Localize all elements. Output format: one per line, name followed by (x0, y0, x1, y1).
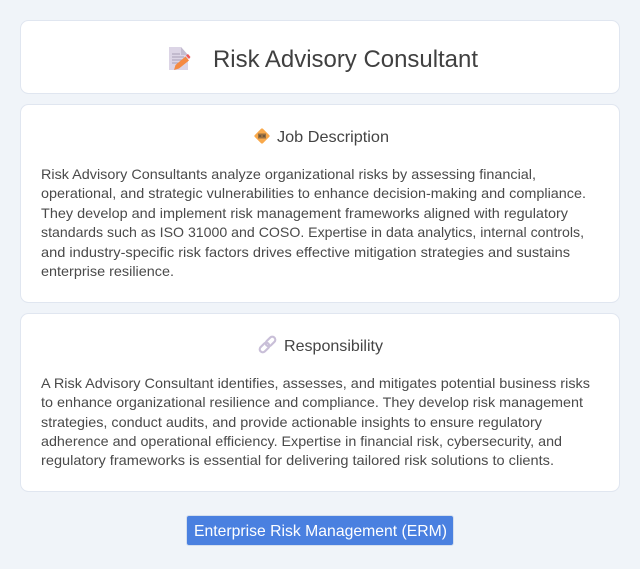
title text: Risk Advisory Consultant (213, 46, 478, 73)
text block: responsibility (41, 375, 590, 468)
text block: job description: enterprise resilience. (41, 263, 174, 279)
text block: responsibility: strategies, conduct audits, and provide actionable insights to ensure regulatory (41, 414, 542, 430)
icon: orange diamond (254, 128, 270, 144)
text block: responsibility: regulatory frameworks is essential for delivering tailored risk solutions to clients. (41, 452, 554, 468)
icon: document with pencil (169, 47, 190, 70)
text block: job description: Risk Advisory Consultants analyze organizational risks by assessing financial, (41, 166, 536, 182)
text block: responsibility: to enhance organizational resilience and compliance. They develop risk management (41, 394, 583, 410)
text block: responsibility: adherence and operational efficiency. Expertise in financial risk, cybersecurity, and (41, 433, 562, 449)
panel: title (20, 20, 620, 94)
text block: job description: operational, and strategic vulnerabilities to enhance decision-making and compliance. (41, 185, 586, 201)
text block: job description: and industry-specific risk factors drives effective mitigation strategies and sustains (41, 244, 570, 260)
text block: job description (41, 166, 586, 279)
heading: responsibility: Responsibility (284, 338, 383, 355)
text block: job description: standards such as ISO 31000 and COSO. Expertise in data analytics, internal controls, (41, 224, 584, 240)
text block: job description: They develop and implement risk management frameworks aligned with regulatory (41, 205, 568, 221)
heading: job description: Job Description (277, 129, 389, 146)
panel: responsibility (20, 314, 620, 492)
panel: job description (20, 104, 620, 302)
button: enterprise risk management (186, 516, 454, 546)
icon: chain link (258, 335, 277, 354)
text block: responsibility: A Risk Advisory Consultant identifies, assesses, and mitigates potential business risks (41, 375, 590, 391)
button: enterprise risk management: Enterprise Risk Management (ERM) (194, 523, 447, 540)
